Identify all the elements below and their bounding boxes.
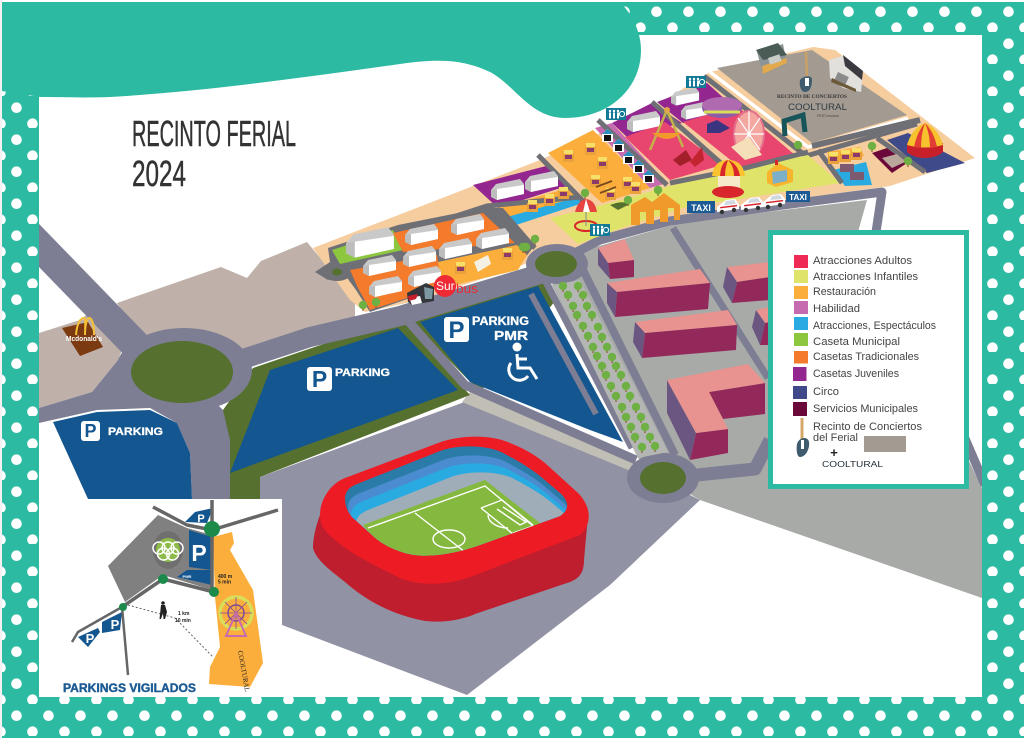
parking label: left: P [84,421,97,441]
parking label: PMR [444,316,529,344]
grey land behind the fairground [552,200,982,598]
inset orange fairground [209,532,263,687]
parking label: left [81,421,163,441]
legend labels: Atracciones Infantiles [813,271,918,283]
zone: adult attractions right [657,83,795,170]
white hairline at left edge [0,0,2,738]
icon: wheelchair [509,342,537,380]
inset P marks: P [191,540,207,566]
stage left [756,43,787,74]
bus [407,283,434,305]
surbus logo [434,275,479,297]
entrance gate [784,115,805,136]
legend labels [813,255,936,444]
zone: catering [548,130,650,203]
parking label: PMR: P [448,317,465,344]
show stalls right [828,148,864,180]
ride: bumper cars [673,147,704,167]
legend swatches [793,255,808,416]
plus sign: + [830,445,838,460]
concert venue [704,43,917,156]
zone: circus and municipal services [827,133,965,186]
dark green verges [223,278,556,499]
panel: location inset [39,499,282,697]
roundabout: north [526,244,588,284]
inset P marks: P [86,631,95,646]
inset P marks [86,513,207,646]
circus tent [907,123,943,158]
light strip beside stadium grounds [462,392,640,474]
toilet icons [590,76,706,236]
zone: adult attractions left [612,103,722,180]
parking label: central [307,366,390,392]
stadium grounds [260,400,700,695]
taxi sign right: TAXI [789,193,807,202]
guitar [800,52,812,92]
inset distance: walking: 1 km [178,611,190,617]
beige land plots [39,242,355,408]
ride: small carousel [575,199,597,231]
white hairline at top edge [0,0,1024,2]
stage right [829,55,863,92]
road junction apron [39,360,230,499]
ride: swing pendulum [650,107,683,150]
inset P marks: PMR [183,574,192,579]
legend labels: Casetas Juveniles [813,368,899,380]
inset heading: PARKINGS VIGILADOS [63,683,196,695]
ride: bouncy castle [767,160,793,187]
mcdonald's [62,318,103,356]
stadium [313,437,589,622]
concert venue swatch [864,436,906,452]
inset P marks: P [111,617,120,632]
inset distance: walking: 10 min [175,618,191,624]
surbus logo: bus [456,281,479,296]
zone: traditional marquees [315,208,535,312]
roundabout: south [627,453,699,503]
venue label: RECINTO DE CONCIERTOS [777,94,847,100]
top teal wave [2,2,641,118]
panel: legend [770,232,966,486]
title [132,113,296,194]
roads [25,192,985,485]
mcdonald's label: Mcdonald's [66,336,102,343]
marquees in purple zones [491,88,709,200]
legend labels: Recinto de Conciertos [813,421,922,433]
parking: left [53,410,192,499]
food stalls [527,143,641,212]
inset grey site [108,515,212,602]
parking: central [230,328,458,473]
surbus logo: Sur [436,279,455,293]
inset parkings [78,508,213,647]
parking label: PMR: PARKING [472,316,529,328]
legend labels: Servicios Municipales [813,403,918,415]
pitch [363,480,540,570]
zone: children's attractions [550,155,840,244]
inset distance: fair: 400 m [218,574,233,580]
inset distance: walking [175,611,191,624]
ride: purple carousel [702,97,742,133]
ride: inflatable arches [610,193,680,225]
pitch markings [368,486,533,552]
legend labels: Atracciones, Espectáculos [813,320,936,332]
icon: pedestrian [160,601,167,619]
residential buildings [598,239,770,460]
legend labels: Atracciones Adultos [813,255,912,267]
trees along fair [359,141,912,311]
legend labels: Caseta Municipal [813,336,900,348]
parking label: central: PARKING [335,367,390,379]
ride: large carousel [712,160,745,198]
taxis [687,191,810,214]
roundabout: left [116,328,252,412]
zone: skill games [595,123,667,188]
arches [76,318,94,335]
inset distance: fair: 5 min [218,580,231,586]
bus stop [407,275,479,305]
legend labels: Habilidad [813,303,860,315]
title: 2024 [132,153,186,194]
parking label: PMR: PMR [494,328,529,343]
legend labels: Circo [813,386,839,398]
fest sublabel: FEST-musica [817,114,839,118]
inset roundabout dots [119,521,220,611]
inset distance: fair [218,574,233,586]
parking label: central: P [312,366,327,392]
inset rotated wordmark: COOLTURAL [236,650,251,692]
inset olympic rings circle [153,531,183,569]
skill booths [602,129,654,183]
inset walking route [128,605,213,657]
legend labels: Restauración [813,286,876,298]
zone: youth marquees and shows [473,165,583,226]
cooltural wordmark: COOLTURAL [788,102,847,112]
taxi sign left: TAXI [691,203,711,213]
internal fair paths [450,102,925,248]
stadium bowl [340,440,580,582]
legend labels: Casetas Tradicionales [813,351,919,363]
inset P marks: P [197,513,205,525]
legend cooltural wordmark: COOLTURAL [822,459,883,469]
inset roads [72,500,278,675]
stadium roof ring [320,437,589,584]
stadium outer wall [313,515,588,622]
icon: legend guitar [797,418,809,457]
legend labels: del Ferial [813,432,858,444]
ride: ferris wheel [731,111,764,160]
parking: PMR [420,286,623,442]
parking label: left: PARKING [108,426,163,438]
tree-lined strip [553,280,668,458]
peach fairground base [313,47,975,312]
title: RECINTO FERIAL [132,113,296,154]
municipal building [882,154,905,168]
inset ferris wheel [220,597,252,636]
